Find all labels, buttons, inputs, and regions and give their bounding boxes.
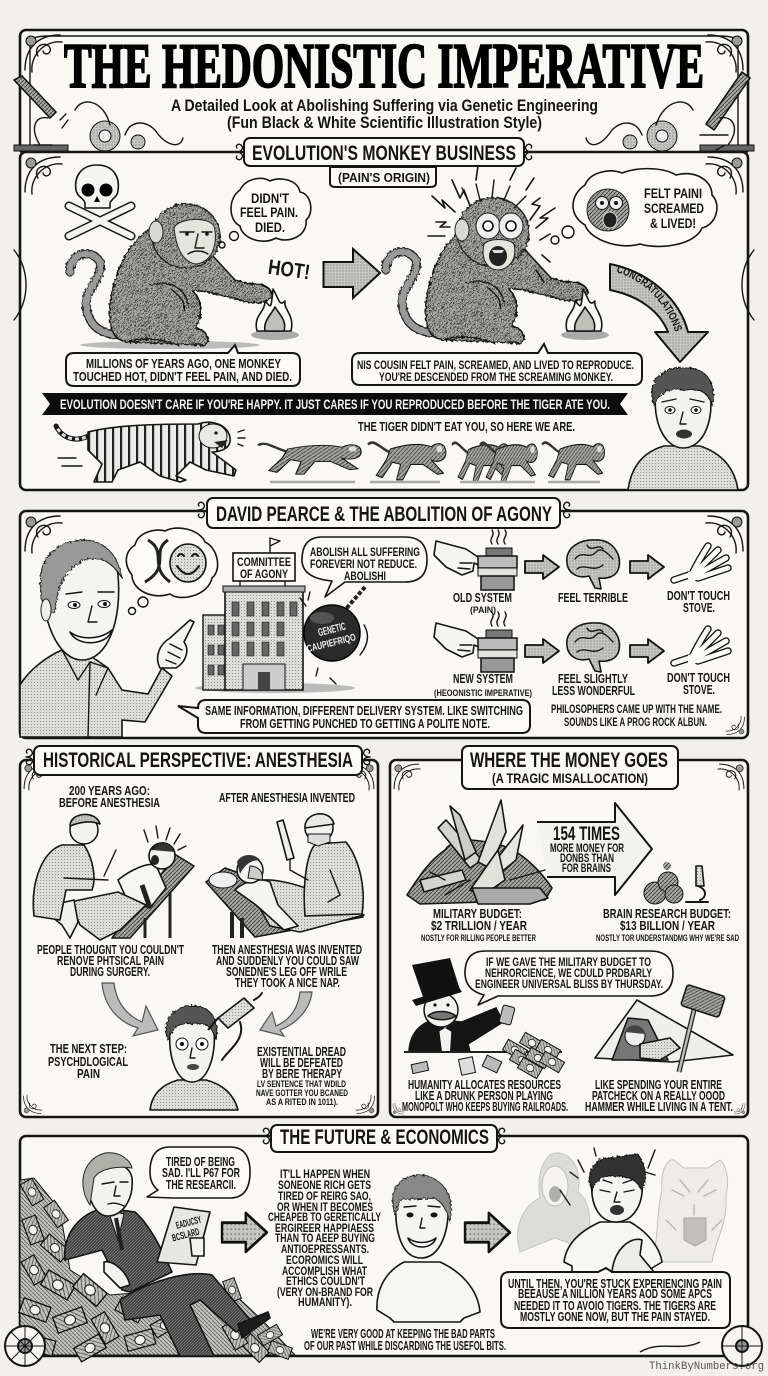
text: economics: TIRED OF REIRG SAO,	[278, 1189, 371, 1203]
icon: left wheel	[5, 1326, 45, 1366]
text: then anesthesia: THEY TOOK A NICE NAP.	[235, 976, 340, 990]
man in tent with hammer	[595, 984, 733, 1072]
speech bubble: abolish: FOREVERI NOT REDUCE.	[310, 557, 417, 571]
brains and microscope	[644, 862, 708, 904]
icon: flame left	[251, 289, 299, 340]
left monkey	[70, 204, 272, 349]
david pearce portrait	[20, 540, 194, 737]
text: economics: OR WHEN IT BECOMES	[277, 1200, 373, 1214]
magazine: BCSLARD	[171, 1227, 201, 1244]
speech bubble: tired of being sad: TIRED OF BEING	[166, 1155, 235, 1169]
patient with gene therapy device	[150, 993, 262, 1110]
text: hammer tent	[585, 1078, 733, 1114]
icon: left microscope	[14, 76, 183, 151]
panel: david pearce	[20, 498, 748, 738]
text: then anesthesia: THEN ANESTHESIA WAS INVENTED	[212, 943, 362, 957]
tiger	[56, 422, 245, 482]
big arrow: 154 times: FOR BRAINS	[562, 861, 611, 875]
heading	[462, 746, 678, 789]
wrecking ball: CAUPIEFRIQO	[306, 632, 357, 655]
money stacks and cards	[411, 1032, 565, 1079]
text: economics: ACCOMPLISH WHAT	[282, 1264, 368, 1278]
text: economics: HUMANITY).	[298, 1295, 352, 1309]
caption: delivery system	[178, 700, 530, 733]
arrow: rich man to text	[222, 1213, 267, 1252]
caption: first monkey	[66, 345, 300, 386]
row: new system	[434, 612, 730, 699]
sign: COMNITTEE	[237, 555, 291, 569]
speech bubble: military budget	[465, 951, 673, 1005]
caption: delivery system: FROM GETTING PUNCHED TO GETTING A POLITE NOTE.	[240, 717, 490, 731]
text: economics: CHEAPEB TO GERETICALLY	[268, 1210, 381, 1224]
banner: evolution doesn't care	[42, 393, 628, 415]
text: economics	[268, 1167, 381, 1309]
text: existential dread: AS A RITED IN 1011).	[266, 1097, 338, 1108]
label: military budget: $2 TRILLION / YEAR	[431, 919, 527, 933]
text: humanity allocates: HUMANITY ALLOCATES RESOURCES	[408, 1078, 561, 1092]
text: then anesthesia: AND SUDDENLY YOU COULD SAW	[216, 954, 359, 968]
text: humanity allocates: LIKE A DRUNK PERSON PLAYING	[415, 1089, 553, 1103]
row: old system: DON'T TOUCH	[667, 589, 730, 603]
caption: first monkey: MILLIONS OF YEARS AGO, ONE MONKEY	[86, 357, 281, 371]
big arrow: 154 times: MORE MONEY FOR	[550, 841, 624, 855]
text: economics: ANTIOEPRESSANTS.	[281, 1242, 369, 1256]
icon: flame right	[561, 289, 609, 340]
heading: WHERE THE MONEY GOES	[470, 749, 668, 772]
icon: right microscope	[586, 72, 754, 151]
text: existential dread: NAVE GOTTER YOU BCANED	[256, 1088, 348, 1099]
thought bubble: felt pain: & LIVED!	[650, 216, 696, 231]
panel: evolution's monkey business	[13, 137, 755, 492]
panel: where the money goes	[390, 746, 748, 1117]
label: before anesthesia: BEFORE ANESTHESIA	[59, 796, 160, 810]
label: brain research budget: $13 BILLION / YEAR	[620, 919, 715, 933]
row: old system: STOVE.	[683, 601, 715, 615]
right monkey	[386, 180, 588, 343]
speech bubble: tired of being sad	[147, 1147, 250, 1198]
big arrow: 154 times	[537, 803, 652, 895]
text: physical pain: RENOVE PHTSICAL PAIN	[57, 954, 164, 968]
running monkeys	[258, 443, 605, 482]
big arrow: 154 times: 154 TIMES	[553, 824, 620, 845]
sign: OF AGONY	[240, 567, 288, 581]
panel: historical perspective anesthesia	[20, 746, 378, 1117]
text: existential dread: BY BERE THERAPY	[262, 1067, 342, 1081]
text: economics: ECOROMICS WILL	[286, 1253, 363, 1267]
label: military budget	[421, 907, 536, 944]
speech bubble: abolish: ABOLISH ALL SUFFERING	[310, 545, 420, 559]
watermark: ThinkByNumbers.org	[649, 1361, 764, 1373]
magazine: EADUCSY	[175, 1215, 203, 1232]
hot label: HOT!	[267, 256, 311, 284]
subtitle: A Detailed Look at Abolishing Suffering via Genetic Engineering	[171, 96, 598, 115]
label: before anesthesia	[59, 784, 160, 810]
wrecking ball	[300, 587, 367, 684]
heading	[26, 746, 370, 775]
text: then anesthesia: SONEDNE'S LEG OFF WRILE	[226, 965, 347, 979]
curved arrow: to gene therapy	[260, 992, 312, 1036]
row: old system	[434, 530, 730, 616]
text: then anesthesia	[212, 943, 362, 990]
speech bubble: tired of being sad: SAD. I'LL P67 FOR	[162, 1166, 240, 1180]
thought bubble: didn't feel pain: FEEL PAIN.	[240, 205, 298, 220]
heading: THE FUTURE & ECONOMICS	[280, 1126, 489, 1149]
row: new system: FEEL SLIGHTLY	[558, 672, 628, 686]
panel: title header	[14, 30, 754, 154]
text: bad parts of our past	[304, 1327, 506, 1353]
text: economics: ERGIREER HAPPIAESS	[275, 1221, 374, 1235]
mini screaming monkey	[587, 189, 629, 231]
text: existential dread: WILL BE DEFEATED	[260, 1056, 343, 1070]
text: existential dread: EXISTENTIAL DREAD	[257, 1045, 346, 1059]
building: committee of agony	[195, 538, 355, 693]
caption: cousin monkey: NIS COUSIN FELT PAIN, SCREAMED, AND LIVED TO REPRODUCE.	[357, 358, 634, 372]
text: physical pain	[37, 943, 184, 979]
speech bubble: military budget: IF WE GAVE THE MILITARY BUDGET TO	[486, 955, 651, 969]
big arrow: 154 times: DONBS THAN	[560, 851, 614, 865]
icon: right wheel	[640, 1326, 762, 1366]
curved arrow: to psychological pain	[102, 983, 158, 1036]
smiling young man	[377, 1175, 480, 1322]
thought bubble: felt pain: FELT PAINI	[644, 186, 702, 201]
monopoly man	[404, 958, 562, 1052]
caption: cousin monkey	[352, 344, 642, 385]
subtitle: (Fun Black & White Scientific Illustration Style)	[227, 113, 542, 132]
label: after anesthesia: AFTER ANESTHESIA INVENTED	[219, 791, 355, 805]
row: new system: (HEOONISTIC IMPERATIVE)	[434, 688, 532, 699]
row: new system: NEW SYSTEM	[453, 672, 513, 686]
row: new system: LESS WONDERFUL	[552, 684, 635, 698]
text: existential dread	[256, 1045, 348, 1108]
worried man	[628, 368, 738, 490]
icon: skull and crossbones	[69, 165, 131, 236]
label: before anesthesia: 200 YEARS AGO:	[69, 784, 150, 798]
icon: therapy device	[208, 993, 262, 1060]
top hat	[412, 958, 462, 1006]
wrecking ball: GENETIC	[317, 621, 347, 639]
text: bad parts of our past: OF OUR PAST WHILE DISCARDING THE USEFOL BITS.	[304, 1339, 506, 1353]
row: new system: DON'T TOUCH	[667, 671, 730, 685]
text: physical pain: PEOPLE THOUGNT YOU COULDN'T	[37, 943, 184, 957]
weapons pile	[407, 800, 552, 904]
text: humanity allocates	[402, 1078, 568, 1114]
pain shock lines	[428, 166, 555, 282]
scene: surgery with anesthesia	[206, 814, 364, 938]
curved arrow: congratulations: CONGRATULATIONS	[617, 266, 682, 332]
magazine	[157, 1207, 210, 1265]
label: military budget: NOSTLY FOR RILLING PEOPLE BETTER	[421, 933, 536, 944]
row: new system: STOVE.	[683, 683, 715, 697]
speech bubble: military budget: ENGINEER UNIVERSAL BLISS BY THURSDAY.	[475, 977, 663, 991]
subheading	[330, 167, 436, 187]
row: old system: FEEL TERRIBLE	[558, 591, 628, 605]
thought bubble: felt pain: SCREAMED	[644, 201, 704, 216]
speech bubble: abolish	[302, 537, 427, 597]
text: economics: ETHICS COULDN'T	[286, 1274, 366, 1288]
thought bubble: didn't feel pain: DIED.	[255, 220, 285, 235]
icon: dna	[145, 540, 170, 582]
thought bubble: felt pain	[551, 169, 717, 246]
callout: until then	[501, 1268, 730, 1328]
text: existential dread: LV SENTENCE THAT WDILD	[257, 1079, 346, 1090]
speech bubble: tired of being sad: THE RESEARCII.	[166, 1178, 236, 1192]
thought bubble: dna and smile	[126, 528, 218, 614]
text: next step	[48, 1042, 128, 1081]
subtitle	[171, 96, 598, 132]
sign	[233, 553, 295, 581]
text: economics: SONEONE RICH GETS	[278, 1178, 371, 1192]
subheading: (PAIN'S ORIGIN)	[338, 170, 430, 185]
speech bubble: abolish: ABOLISHI	[344, 569, 386, 583]
text: next step: THE NEXT STEP:	[50, 1042, 127, 1056]
text: next step: PSYCHDLOGICAL	[48, 1055, 128, 1069]
scene: surgery without anesthesia	[33, 814, 194, 940]
note: philosophers	[551, 702, 722, 729]
arrow: young man to sad man	[465, 1213, 510, 1252]
text: economics: THAN TO AEEP BUYING	[275, 1231, 375, 1245]
curved arrow: congratulations	[609, 263, 709, 363]
text: economics: IT'LL HAPPEN WHEN	[280, 1167, 370, 1181]
heading	[236, 138, 532, 166]
speech bubble: military budget: NEHRORCIENCE, WE CDULD PRDBARLY	[485, 966, 652, 980]
heading	[263, 1125, 505, 1152]
text: next step: PAIN	[77, 1067, 100, 1081]
money pile	[19, 1178, 295, 1362]
text: economics: (VERY ON-BRAND FOR	[277, 1285, 373, 1299]
caption: first monkey: TOUCHED HOT, DIDN'T FEEL PAIN, AND DIED.	[73, 370, 292, 384]
icon: smile	[170, 544, 206, 582]
label: military budget: MILITARY BUDGET:	[433, 907, 522, 921]
label: brain research budget	[596, 907, 739, 944]
caption: delivery system: SAME INFORMATION, DIFFERENT DELIVERY SYSTEM. LIKE SWITCHING	[205, 704, 523, 718]
panel: the future and economics	[5, 1125, 762, 1366]
text: physical pain: DURING SURGERY.	[70, 965, 150, 979]
row: old system: (PAIN)	[470, 605, 496, 616]
heading: EVOLUTION'S MONKEY BUSINESS	[252, 142, 516, 165]
rich man reading	[65, 1153, 270, 1356]
thought bubble: didn't feel pain	[219, 178, 311, 248]
sad man with hand on chest	[560, 1148, 662, 1272]
heading	[198, 498, 570, 528]
heading: (A TRAGIC MISALLOCATION)	[492, 770, 648, 786]
row: old system: OLD SYSTEM	[453, 591, 512, 605]
thought bubble: didn't feel pain: DIDN'T	[251, 191, 290, 206]
text: humanity allocates: MONOPOLT WHO KEEPS BUYING RAILROADS.	[402, 1100, 568, 1114]
heading: HISTORICAL PERSPECTIVE: ANESTHESIA	[43, 749, 353, 772]
text: tiger didn't eat you: THE TIGER DIDN'T EAT YOU, SO HERE WE ARE.	[358, 420, 575, 434]
heading: DAVID PEARCE & THE ABOLITION OF AGONY	[216, 503, 552, 526]
arrow between monkeys	[324, 249, 380, 298]
text: bad parts of our past: WE'RE VERY GOOD AT KEEPING THE BAD PARTS	[311, 1327, 495, 1341]
ghost monkey	[518, 1153, 590, 1252]
caption: cousin monkey: YOU'RE DESCENDED FROM THE SCREAMING MONKEY.	[379, 370, 613, 384]
ghost tiger	[650, 1160, 728, 1262]
